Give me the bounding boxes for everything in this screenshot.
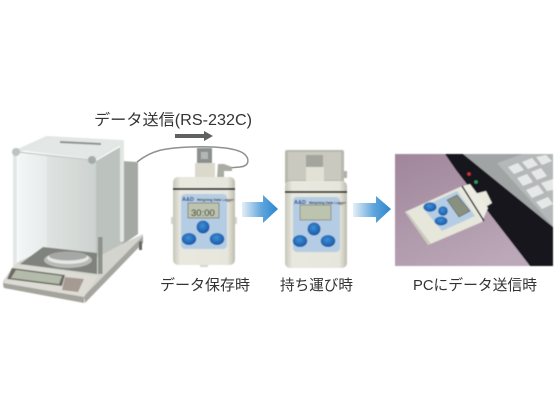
front panel — [3, 264, 98, 297]
logger end cap — [460, 184, 488, 222]
weighing chamber back wall — [47, 155, 97, 256]
weighing pan floor — [20, 247, 97, 274]
serial plug — [217, 164, 232, 178]
maker logo: A&D — [182, 197, 194, 203]
logger plug — [474, 191, 492, 208]
product name: Weighing Data Logger — [309, 201, 347, 205]
caption: saving data: データ保存時 — [160, 276, 250, 294]
buttons — [308, 222, 320, 236]
logger face panel — [422, 191, 475, 231]
arrow: blue step two — [353, 196, 391, 223]
data cable — [137, 147, 248, 168]
logger LCD — [447, 195, 470, 217]
arrow: blue step one — [242, 195, 278, 223]
face panel — [293, 197, 340, 252]
indicator lights — [467, 172, 471, 176]
product name: Weighing Data Logger — [197, 198, 235, 202]
chamber top glass — [18, 139, 121, 159]
logger body — [405, 187, 482, 245]
LCD display — [300, 205, 331, 220]
face panel — [181, 194, 227, 249]
arrow: data direction — [175, 131, 213, 141]
caption: sending to PC: PCにデータ送信時 — [413, 276, 537, 294]
photo: logger plugged into laptop — [395, 154, 553, 266]
logger buttons — [424, 202, 436, 212]
laptop deck — [463, 154, 553, 227]
frame bars — [15, 138, 122, 276]
maker logo: A&D — [294, 200, 306, 206]
caption: carrying: 持ち運び時 — [280, 277, 353, 294]
laptop edge — [445, 154, 553, 266]
keyboard keys — [508, 155, 553, 209]
device: data logger with cap — [285, 150, 347, 268]
body — [173, 177, 235, 265]
LCD display — [188, 203, 219, 218]
LCD reading: 30:00 — [191, 208, 215, 219]
rear housing — [122, 161, 138, 245]
cap — [285, 150, 344, 184]
photo background — [395, 154, 553, 266]
USB plug — [197, 148, 212, 164]
base plate — [3, 234, 143, 302]
heading: data transmission: データ送信(RS-232C) — [94, 110, 252, 129]
device: data logger with USB connector — [171, 148, 237, 267]
glass front door — [18, 154, 47, 262]
buttons — [196, 220, 210, 234]
body — [285, 181, 347, 268]
icon: analytical balance — [3, 138, 143, 303]
glass door handle — [98, 237, 102, 274]
